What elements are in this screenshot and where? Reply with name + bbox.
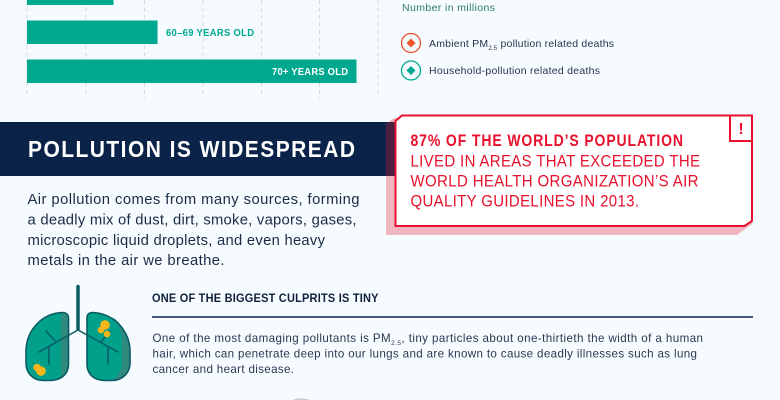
callout text: WORLD HEALTH ORGANIZATION’S AIR xyxy=(410,173,698,191)
intro paragraph xyxy=(28,192,360,269)
legend item: ambient PM2.5: 2.5 xyxy=(488,46,498,52)
legend item: household pollution xyxy=(402,61,600,80)
intro paragraph: a deadly mix of dust, dirt, smoke, vapors, gases, xyxy=(28,212,356,228)
legend item: household pollution: Household-pollution related deaths xyxy=(429,65,600,77)
section: one of the biggest culprits is tiny xyxy=(152,291,753,376)
legend item: ambient PM2.5: pollution related deaths xyxy=(497,38,614,50)
legend item: ambient PM2.5 xyxy=(402,34,614,52)
bar: 60-69 years old: 60–69 YEARS OLD xyxy=(166,28,254,39)
callout text: QUALITY GUIDELINES IN 2013. xyxy=(410,193,639,211)
legend item: ambient PM2.5: Ambient PM xyxy=(429,38,488,50)
section banner xyxy=(0,122,396,176)
subheading: ONE OF THE BIGGEST CULPRITS IS TINY xyxy=(152,291,379,305)
partial grey shape at bottom edge xyxy=(292,398,310,400)
icon: lungs with particles xyxy=(26,286,130,380)
banner heading: POLLUTION IS WIDESPREAD xyxy=(28,136,355,162)
particles xyxy=(33,320,110,376)
alert icon: ! xyxy=(738,121,744,138)
bar: partial upper bar xyxy=(27,0,114,5)
bar: 70+ years old: 70+ YEARS OLD xyxy=(272,67,348,78)
bar chart: deaths by age group xyxy=(27,0,378,99)
callout text: LIVED IN AREAS THAT EXCEEDED THE xyxy=(410,153,700,171)
body text: 2.5 xyxy=(391,340,401,347)
bar: 70+ years old xyxy=(27,60,356,83)
body text: cancer and heart disease. xyxy=(152,363,294,376)
alert icon xyxy=(730,116,752,141)
trachea and bronchi xyxy=(39,286,118,364)
intro paragraph: metals in the air we breathe. xyxy=(28,253,224,269)
bar: 60-69 years old xyxy=(27,20,254,44)
body text: hair, which can penetrate deep into our lungs and are known to cause deadly illnesses such as lung xyxy=(152,348,697,360)
callout text xyxy=(410,132,700,211)
intro paragraph: Air pollution comes from many sources, forming xyxy=(28,192,360,208)
body text: One of the most damaging pollutants is PM xyxy=(152,332,391,345)
callout text: 87% OF THE WORLD’S POPULATION xyxy=(410,132,683,150)
callout: 87 percent statistic xyxy=(386,116,752,235)
intro paragraph: microscopic liquid droplets, and even heavy xyxy=(28,233,326,249)
body text: , tiny particles about one-thirtieth the width of a human xyxy=(401,332,703,345)
right lung xyxy=(87,312,130,380)
left lung xyxy=(26,312,68,380)
body text xyxy=(152,332,703,376)
legend caption: Number in millions xyxy=(402,2,495,14)
chart legend xyxy=(402,2,614,80)
